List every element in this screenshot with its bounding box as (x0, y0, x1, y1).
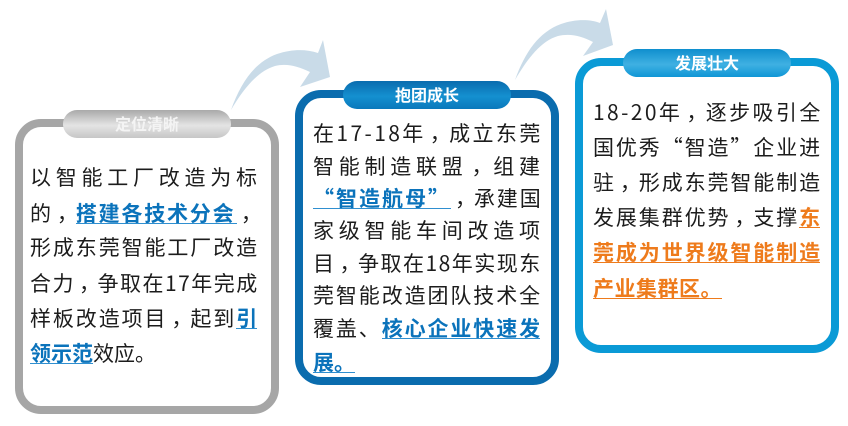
text block: 抱团成长 (313, 118, 545, 377)
text block: 抱团成长: “智造航母” (313, 183, 451, 213)
heading: 定位清晰 (63, 110, 231, 138)
text block: 抱团成长: 智能制造联盟，组建 (313, 151, 545, 181)
text block: 抱团成长: 莞智能改造团队技术全 (313, 280, 542, 310)
panel: 抱团成长 (295, 90, 559, 385)
arrow: second to third panel (515, 9, 613, 80)
text block: 发展壮大: 驻，形成东莞智能制造 (593, 167, 822, 197)
text block: 定位清晰: 搭建各技术分会 (76, 198, 235, 228)
text block: 发展壮大: 发展集群优势，支撑 (593, 202, 799, 232)
text block: 抱团成长: 家级智能车间改造项 (313, 215, 545, 245)
text block: 定位清晰: 合力，争取在17年完成 (30, 268, 259, 298)
text block: 定位清晰: 的， ， (30, 198, 264, 228)
panel: 定位清晰 (15, 119, 279, 414)
arrow: first to second panel (231, 40, 330, 110)
text block: 发展壮大: 18-20年，逐步吸引全 (593, 97, 823, 127)
heading: 发展壮大: 发展壮大 (675, 50, 739, 74)
text block: 发展壮大 (593, 97, 823, 303)
text block: 定位清晰: 引 (236, 303, 259, 333)
text block: 定位清晰: 效应。 (93, 338, 156, 368)
panel: 发展壮大 (575, 58, 839, 353)
heading: 发展壮大 (623, 49, 791, 77)
text block: 抱团成长: ，承建国 (455, 183, 543, 213)
text block: 抱团成长: 目，争取在18年实现东 (313, 248, 542, 278)
text block: 定位清晰: 形成东莞智能工厂改造 (30, 232, 259, 262)
text block: 发展壮大: 国优秀“智造”企业进 (593, 132, 822, 162)
text block: 定位清晰 (30, 162, 264, 368)
heading: 抱团成长: 抱团成长 (395, 82, 459, 106)
text block: 抱团成长: 展。 (313, 347, 355, 377)
text block: 发展壮大: 东 (799, 202, 822, 232)
heading: 定位清晰: 定位清晰 (115, 111, 179, 135)
text block: 发展壮大: 产业集群区。 (593, 273, 722, 303)
text block: 定位清晰: 以智能工厂改造为标 (30, 162, 262, 192)
text block: 发展壮大: 莞成为世界级智能制造 (593, 237, 822, 267)
text block: 抱团成长: 核心企业快速发 (382, 313, 542, 343)
text block: 定位清晰: 领示范 (30, 338, 93, 368)
text block: 抱团成长: 在17-18年，成立东莞 (313, 118, 543, 148)
heading: 抱团成长 (343, 81, 511, 109)
text block: 定位清晰: 样板改造项目，起到 (30, 303, 236, 333)
text block: 抱团成长: 覆盖、 (313, 313, 382, 343)
